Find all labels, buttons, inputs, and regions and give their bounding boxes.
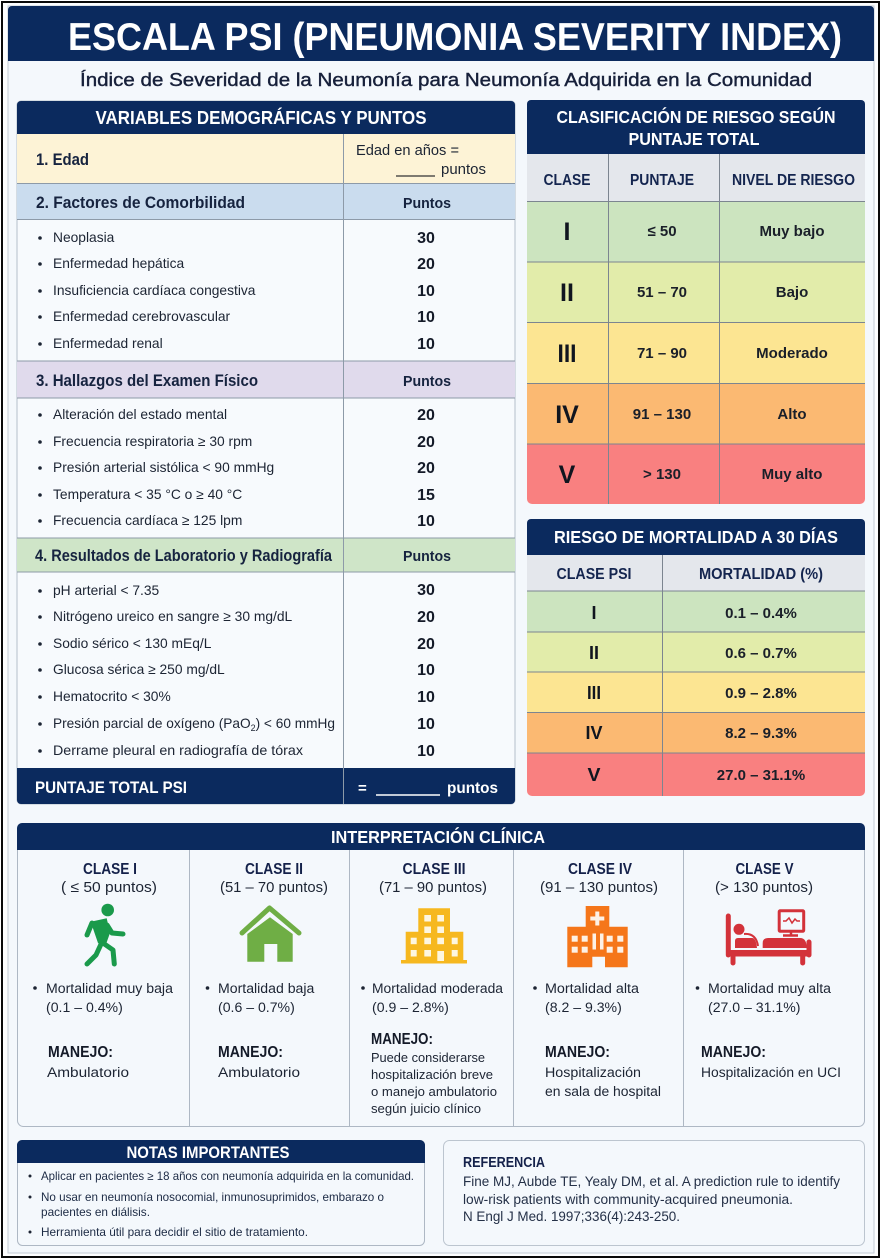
row: clase II: 51 – 70 (637, 284, 687, 301)
row: clase I (527, 201, 865, 262)
row: examen físico heading: Puntos (403, 373, 451, 390)
list: comorbilidad: Enfermedad hepática (53, 256, 184, 271)
heading: clasificación: CLASIFICACIÓN DE RIESGO SEGÚN (556, 106, 836, 127)
row: V: V (588, 765, 600, 785)
heading: variables (17, 101, 515, 134)
list: comorbilidad: 10 (417, 309, 435, 326)
row: IV (527, 712, 865, 753)
list: comorbilidad: Enfermedad renal (53, 336, 163, 351)
column headers (527, 555, 865, 591)
column: clase II: Ambulatorio (218, 1064, 300, 1080)
list: laboratorio: 10 (417, 689, 435, 706)
row: V: 27.0 – 31.1% (717, 767, 805, 784)
list: comorbilidad (38, 230, 435, 353)
column headers (527, 154, 865, 201)
icon: hospital (567, 906, 628, 967)
row: comorbilidad heading (17, 183, 515, 220)
column headers: PUNTAJE (630, 172, 694, 189)
column headers: CLASE (544, 172, 591, 189)
heading: notas (17, 1140, 425, 1163)
row: III: III (587, 683, 601, 703)
list: laboratorio: ) < 60 mmHg (256, 716, 335, 731)
list: laboratorio: Presión parcial de oxígeno (PaO (53, 716, 252, 731)
row: examen físico heading: 3. Hallazgos del Examen Físico (36, 372, 258, 390)
icon: walking person (87, 904, 123, 964)
row: clase III (527, 322, 865, 383)
list: examen físico: 20 (417, 460, 435, 477)
column: clase I: ( ≤ 50 puntos) (61, 879, 157, 896)
panel: referencia: Fine MJ, Aubde TE, Yealy DM, et al. A prediction rule to identify (463, 1174, 840, 1189)
list: laboratorio: Nitrógeno ureico en sangre ≥ 30 mg/dL (53, 609, 293, 624)
row: II: 0.6 – 0.7% (725, 645, 797, 662)
list: laboratorio (38, 582, 435, 760)
list: laboratorio: Glucosa sérica ≥ 250 mg/dL (53, 662, 225, 677)
row: III (527, 672, 865, 712)
total bar (17, 768, 515, 804)
column: clase I: Ambulatorio (47, 1064, 129, 1080)
list: laboratorio: 10 (417, 716, 435, 733)
list: examen físico: Presión arterial sistólica < 90 mmHg (53, 460, 274, 475)
column: clase V: CLASE V (736, 861, 794, 878)
column: clase III: CLASE III (402, 861, 466, 878)
list: comorbilidad: 10 (417, 336, 435, 353)
heading: variables: VARIABLES DEMOGRÁFICAS Y PUNTOS (96, 107, 426, 128)
list: examen físico: Temperatura < 35 °C o ≥ 40 °C (53, 487, 242, 502)
row: clase II: Bajo (776, 284, 808, 301)
column: clase II: CLASE II (245, 861, 303, 878)
list: laboratorio: Hematocrito < 30% (53, 689, 171, 704)
column headers: CLASE PSI (556, 566, 632, 583)
panel: referencia: N Engl J Med. 1997;336(4):243-250. (463, 1209, 680, 1224)
row: I: 0.1 – 0.4% (725, 605, 797, 622)
row: edad: Edad en años = (356, 143, 459, 159)
column: clase II: Mortalidad baja (218, 980, 315, 996)
notes list: pacientes en diálisis. (41, 1205, 150, 1219)
list: laboratorio: Derrame pleural en radiografía de tórax (53, 743, 303, 758)
column: clase I: Mortalidad muy baja (46, 980, 173, 996)
list: comorbilidad: 10 (417, 283, 435, 300)
column: clase V: Mortalidad muy alta (708, 980, 831, 996)
row: clase I: I (564, 218, 570, 246)
column: clase IV: CLASE IV (568, 861, 633, 878)
list: examen físico: Alteración del estado mental (53, 407, 227, 422)
column: clase III: o manejo ambulatorio (371, 1084, 497, 1099)
list: laboratorio: Sodio sérico < 130 mEq/L (53, 636, 212, 651)
column: clase IV (533, 861, 661, 1099)
list: examen físico (38, 407, 435, 530)
column: clase IV: Hospitalización (545, 1064, 641, 1080)
column: clase I: (0.1 – 0.4%) (46, 999, 123, 1015)
list: comorbilidad: 20 (417, 256, 435, 273)
column: clase II: (0.6 – 0.7%) (218, 999, 295, 1015)
column: clase V: MANEJO: (701, 1044, 766, 1061)
row: clase IV (527, 383, 865, 444)
list: comorbilidad: Insuficiencia cardíaca congestiva (53, 283, 256, 298)
column: clase IV: (91 – 130 puntos) (540, 879, 658, 896)
column: clase II (206, 861, 328, 1080)
panel: variables demográficas y puntos (17, 101, 515, 804)
column headers: MORTALIDAD (%) (699, 566, 823, 583)
row: clase IV: Alto (777, 406, 807, 423)
panel: clasificación de riesgo (527, 100, 865, 504)
heading: clasificación (527, 100, 865, 154)
row: I: I (591, 603, 597, 623)
row: clase III: 71 – 90 (637, 345, 687, 362)
list: examen físico: Frecuencia cardíaca ≥ 125 lpm (53, 513, 242, 528)
heading: notas: NOTAS IMPORTANTES (126, 1143, 290, 1162)
row: II (527, 632, 865, 672)
column: clase III: hospitalización breve (371, 1067, 493, 1082)
column: clase IV: en sala de hospital (545, 1083, 661, 1099)
list: laboratorio: 20 (417, 609, 435, 626)
list: laboratorio: 20 (417, 636, 435, 653)
list: laboratorio: 30 (417, 582, 435, 599)
column: clase V (696, 861, 841, 1080)
row: laboratorio heading: 4. Resultados de Laboratorio y Radiografía (35, 547, 333, 565)
column: clase III: Puede considerarse (371, 1050, 485, 1065)
notes list: No usar en neumonía nosocomial, inmunosuprimidos, embarazo o (41, 1190, 384, 1204)
column: clase III: (71 – 90 puntos) (379, 879, 487, 896)
title: ESCALA PSI (PNEUMONIA SEVERITY INDEX) (68, 16, 842, 59)
column: clase IV: (8.2 – 9.3%) (545, 999, 622, 1015)
total bar: PUNTAJE TOTAL PSI (35, 778, 187, 797)
row: clase IV: IV (555, 401, 579, 429)
list: laboratorio: pH arterial < 7.35 (53, 583, 160, 598)
panel: interpretación clínica (17, 823, 865, 1127)
column: clase I: MANEJO: (48, 1044, 113, 1061)
heading: interpretación: INTERPRETACIÓN CLÍNICA (331, 826, 545, 847)
column: clase V: Hospitalización en UCI (701, 1064, 841, 1080)
total bar: = (358, 780, 367, 797)
column: clase III: Mortalidad moderada (372, 980, 503, 996)
row: clase V: > 130 (643, 466, 681, 483)
list: comorbilidad: 30 (417, 230, 435, 247)
heading: clasificación: PUNTAJE TOTAL (628, 129, 760, 149)
row: III: 0.9 – 2.8% (725, 685, 797, 702)
panel: referencia: low-risk patients with community-acquired pneumonia. (463, 1192, 793, 1207)
row: edad (17, 134, 515, 183)
column: clase IV: Mortalidad alta (545, 980, 639, 996)
heading: mortalidad: RIESGO DE MORTALIDAD A 30 DÍAS (554, 526, 838, 547)
row: clase V: Muy alto (762, 466, 822, 483)
column: clase III: según juicio clínico (371, 1101, 481, 1116)
panel: riesgo de mortalidad (527, 519, 865, 796)
column: clase V: (> 130 puntos) (715, 879, 813, 896)
heading: interpretación (17, 823, 865, 850)
icon: house (242, 908, 299, 962)
row: examen físico heading (17, 361, 515, 398)
row: laboratorio heading: Puntos (403, 548, 451, 565)
subtitle: Índice de Severidad de la Neumonía para Neumonía Adquirida en la Comunidad (80, 69, 812, 90)
row: comorbilidad heading: Puntos (403, 195, 451, 212)
column: clase IV: MANEJO: (545, 1044, 610, 1061)
panel: notas importantes (17, 1140, 425, 1246)
icon: ICU bed with monitor (726, 911, 811, 963)
list: laboratorio: 10 (417, 662, 435, 679)
row: edad: 1. Edad (36, 151, 89, 169)
list: comorbilidad: Neoplasia (53, 230, 115, 245)
row: edad: puntos (441, 162, 486, 178)
row: clase I: Muy bajo (759, 223, 825, 240)
list: examen físico: 10 (417, 513, 435, 530)
row: laboratorio heading (17, 538, 515, 572)
panel: referencia (444, 1140, 864, 1246)
row: clase V (527, 444, 865, 504)
list: examen físico: 20 (417, 407, 435, 424)
column: clase III (361, 861, 503, 1116)
row: IV: IV (586, 723, 602, 743)
row: clase II: II (560, 279, 574, 307)
list: examen físico: 15 (417, 487, 435, 504)
column: clase II: (51 – 70 puntos) (220, 879, 328, 896)
heading: mortalidad (527, 519, 865, 555)
row: clase IV: 91 – 130 (633, 406, 691, 423)
notes list (28, 1169, 414, 1239)
row: comorbilidad heading: 2. Factores de Comorbilidad (36, 194, 245, 212)
column headers: NIVEL DE RIESGO (732, 172, 855, 189)
column: clase III: MANEJO: (371, 1031, 433, 1048)
notes list: Aplicar en pacientes ≥ 18 años con neumonía adquirida en la comunidad. (41, 1169, 414, 1183)
list: laboratorio: 2 (251, 723, 256, 733)
total bar: puntos (447, 780, 498, 797)
row: clase I: ≤ 50 (647, 223, 677, 240)
row: IV: 8.2 – 9.3% (725, 725, 797, 742)
row: clase III: III (558, 340, 576, 368)
list: comorbilidad: Enfermedad cerebrovascular (53, 309, 231, 324)
column: clase V: (27.0 – 31.1%) (708, 999, 800, 1015)
column: clase III: (0.9 – 2.8%) (372, 999, 449, 1015)
row: clase II (527, 262, 865, 322)
row: V (527, 753, 865, 796)
notes list: Herramienta útil para decidir el sitio de tratamiento. (41, 1225, 308, 1239)
icon: building (401, 908, 467, 964)
list: laboratorio: 10 (417, 743, 435, 760)
row: II: II (589, 643, 599, 663)
row: clase III: Moderado (756, 345, 828, 362)
list: examen físico: Frecuencia respiratoria ≥ 30 rpm (53, 434, 252, 449)
column: clase I (33, 861, 173, 1080)
panel: referencia: REFERENCIA (463, 1155, 545, 1171)
column: clase II: MANEJO: (218, 1044, 283, 1061)
row: clase V: V (559, 461, 576, 489)
column: clase I: CLASE I (83, 861, 137, 878)
row: I (527, 591, 865, 632)
list: examen físico: 20 (417, 434, 435, 451)
